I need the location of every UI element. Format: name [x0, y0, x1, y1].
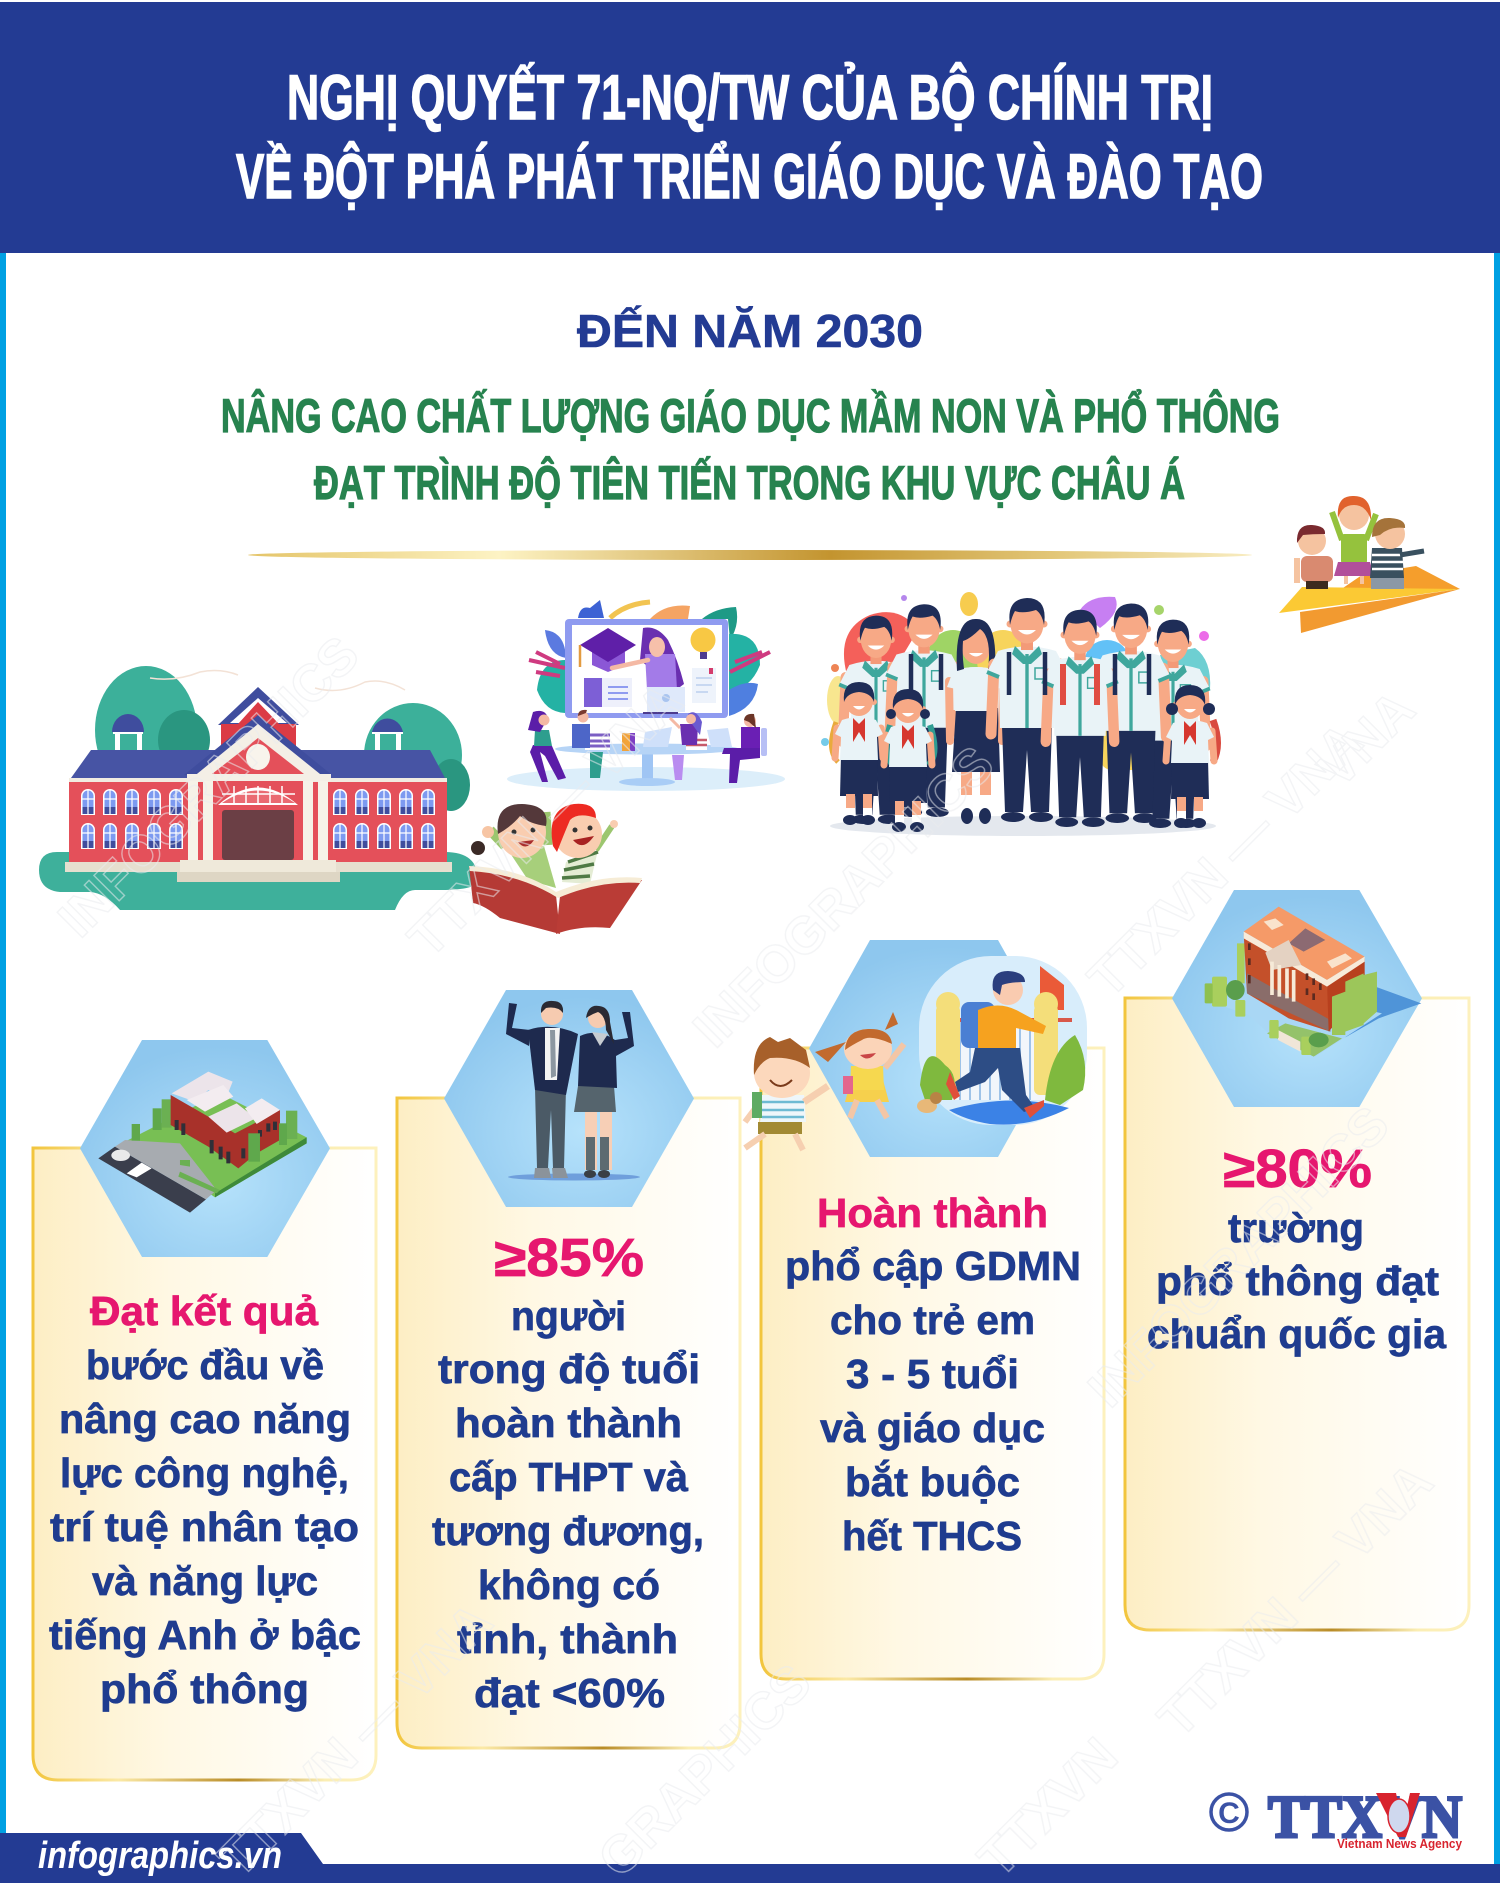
card text: phổ cập GDMN	[785, 1243, 1081, 1289]
card text: và năng lực	[92, 1558, 318, 1604]
panel: card 4	[1125, 890, 1469, 1630]
girl centre	[1332, 496, 1376, 584]
table	[555, 727, 739, 786]
windows	[81, 789, 435, 849]
watermarks: VNA	[1307, 680, 1426, 798]
portico	[184, 715, 332, 873]
watermarks: INFOGRAPHICS	[682, 736, 1005, 1058]
right side border	[1494, 253, 1500, 1868]
illustration: kids on paper plane	[1279, 496, 1460, 633]
card text: không có	[478, 1562, 660, 1608]
girl	[471, 804, 556, 888]
walls	[69, 778, 447, 782]
hexagon icon: national standard school	[1172, 890, 1422, 1107]
steps	[65, 860, 452, 882]
people	[528, 710, 767, 783]
ground	[39, 852, 478, 910]
bulb	[690, 628, 716, 659]
card text: ≥80%	[1223, 1139, 1372, 1199]
domes	[112, 714, 403, 751]
card text: cho trẻ em	[830, 1297, 1035, 1343]
card text: trường	[1228, 1205, 1364, 1251]
watermarks: GRAPHICS	[587, 1653, 823, 1883]
paper	[692, 668, 716, 703]
upper gable	[218, 687, 299, 760]
logo: TTXVN: TTXVN	[1268, 1784, 1462, 1850]
card text: tỉnh, thành	[457, 1616, 678, 1662]
subheading: goal: ĐẠT TRÌNH ĐỘ TIÊN TIẾN TRONG KHU VỰC CHÂU Á	[314, 456, 1185, 509]
girl	[815, 1012, 904, 1118]
illustration: group of students	[821, 592, 1218, 836]
trees	[95, 666, 470, 811]
watermarks: TTXVN — VNA	[1147, 1452, 1444, 1748]
roof	[71, 750, 445, 778]
card text: ≥85%	[494, 1228, 644, 1288]
boy	[552, 804, 618, 884]
birds	[150, 671, 405, 690]
card text: bước đầu về	[86, 1342, 324, 1388]
card text: phổ thông đạt	[1156, 1258, 1439, 1304]
card text	[432, 1228, 704, 1716]
left side border	[0, 253, 6, 1838]
illustration: online classroom	[507, 600, 785, 791]
small students	[831, 682, 1218, 832]
copyright symbol	[1211, 1794, 1247, 1830]
card text: tiếng Anh ở bậc	[49, 1612, 361, 1658]
logo: TTXVN: Vietnam News Agency	[1337, 1836, 1463, 1851]
illustration: children reading on book	[469, 804, 642, 934]
watermarks: TTXVN — VNA	[207, 1592, 504, 1883]
hexagon icon: children going to school	[745, 940, 1087, 1157]
watermarks: TTXVN — VNA	[1077, 712, 1374, 1008]
card text: trí tuệ nhân tạo	[50, 1504, 359, 1550]
card text: bắt buộc	[845, 1459, 1020, 1505]
illustration: school building	[39, 666, 478, 910]
boy right	[1370, 518, 1424, 589]
running boy scene	[917, 956, 1087, 1125]
subheading: year: ĐẾN NĂM 2030	[577, 305, 923, 357]
card text: trong độ tuổi	[438, 1346, 700, 1392]
hexagon icon: graduates	[444, 990, 694, 1207]
card text	[49, 1288, 361, 1712]
footer bar	[0, 1864, 1500, 1883]
subheading: goal	[221, 389, 1280, 509]
teacher	[612, 628, 685, 713]
card text	[1147, 1139, 1447, 1357]
card text: tương đương,	[432, 1508, 704, 1554]
backpack straps	[1063, 664, 1097, 705]
watermarks	[47, 626, 1444, 1883]
little boy	[745, 1037, 828, 1150]
hexagon icon: school aerial	[80, 1040, 330, 1257]
card text: và giáo dục	[820, 1405, 1045, 1451]
copyright symbol: C	[1218, 1797, 1240, 1830]
card background	[397, 1098, 740, 1748]
watermarks: INFOGRAPHICS	[1077, 1096, 1400, 1418]
card text: đạt <60%	[474, 1670, 665, 1716]
open book	[469, 866, 642, 934]
panel: card 1	[33, 1040, 376, 1780]
card text: hết THCS	[842, 1513, 1022, 1559]
title	[236, 62, 1263, 212]
card	[584, 678, 632, 707]
footer tab: infographics.vn: infographics.vn	[38, 1835, 282, 1877]
cap	[580, 628, 636, 672]
monitor	[565, 619, 728, 718]
card text: hoàn thành	[455, 1400, 682, 1446]
panel: card 3	[745, 940, 1104, 1679]
leaves	[529, 600, 770, 716]
card text: nâng cao năng	[59, 1396, 351, 1442]
card text	[785, 1190, 1081, 1559]
card background	[1125, 998, 1469, 1630]
card text: phổ thông	[100, 1666, 309, 1712]
floor	[507, 767, 785, 791]
tall students	[839, 598, 1210, 828]
card text: Hoàn thành	[817, 1190, 1048, 1236]
card text: chuẩn quốc gia	[1147, 1311, 1447, 1357]
gold divider	[248, 550, 1252, 560]
card background	[33, 1148, 376, 1780]
watermarks: INFOGRAPHICS	[47, 626, 370, 948]
watermarks: TTXVN — VNA	[397, 672, 694, 968]
panel: card 2	[397, 990, 740, 1748]
card text: Đạt kết quả	[90, 1288, 319, 1334]
header banner with title	[0, 2, 1500, 253]
card text: lực công nghệ,	[60, 1450, 349, 1496]
colour blobs	[821, 592, 1210, 770]
card text: người	[511, 1293, 626, 1339]
card background	[761, 1048, 1104, 1679]
card text: 3 - 5 tuổi	[846, 1351, 1019, 1397]
card text: cấp THPT và	[449, 1454, 688, 1500]
shadow	[830, 816, 1216, 836]
kid left	[1294, 525, 1333, 589]
